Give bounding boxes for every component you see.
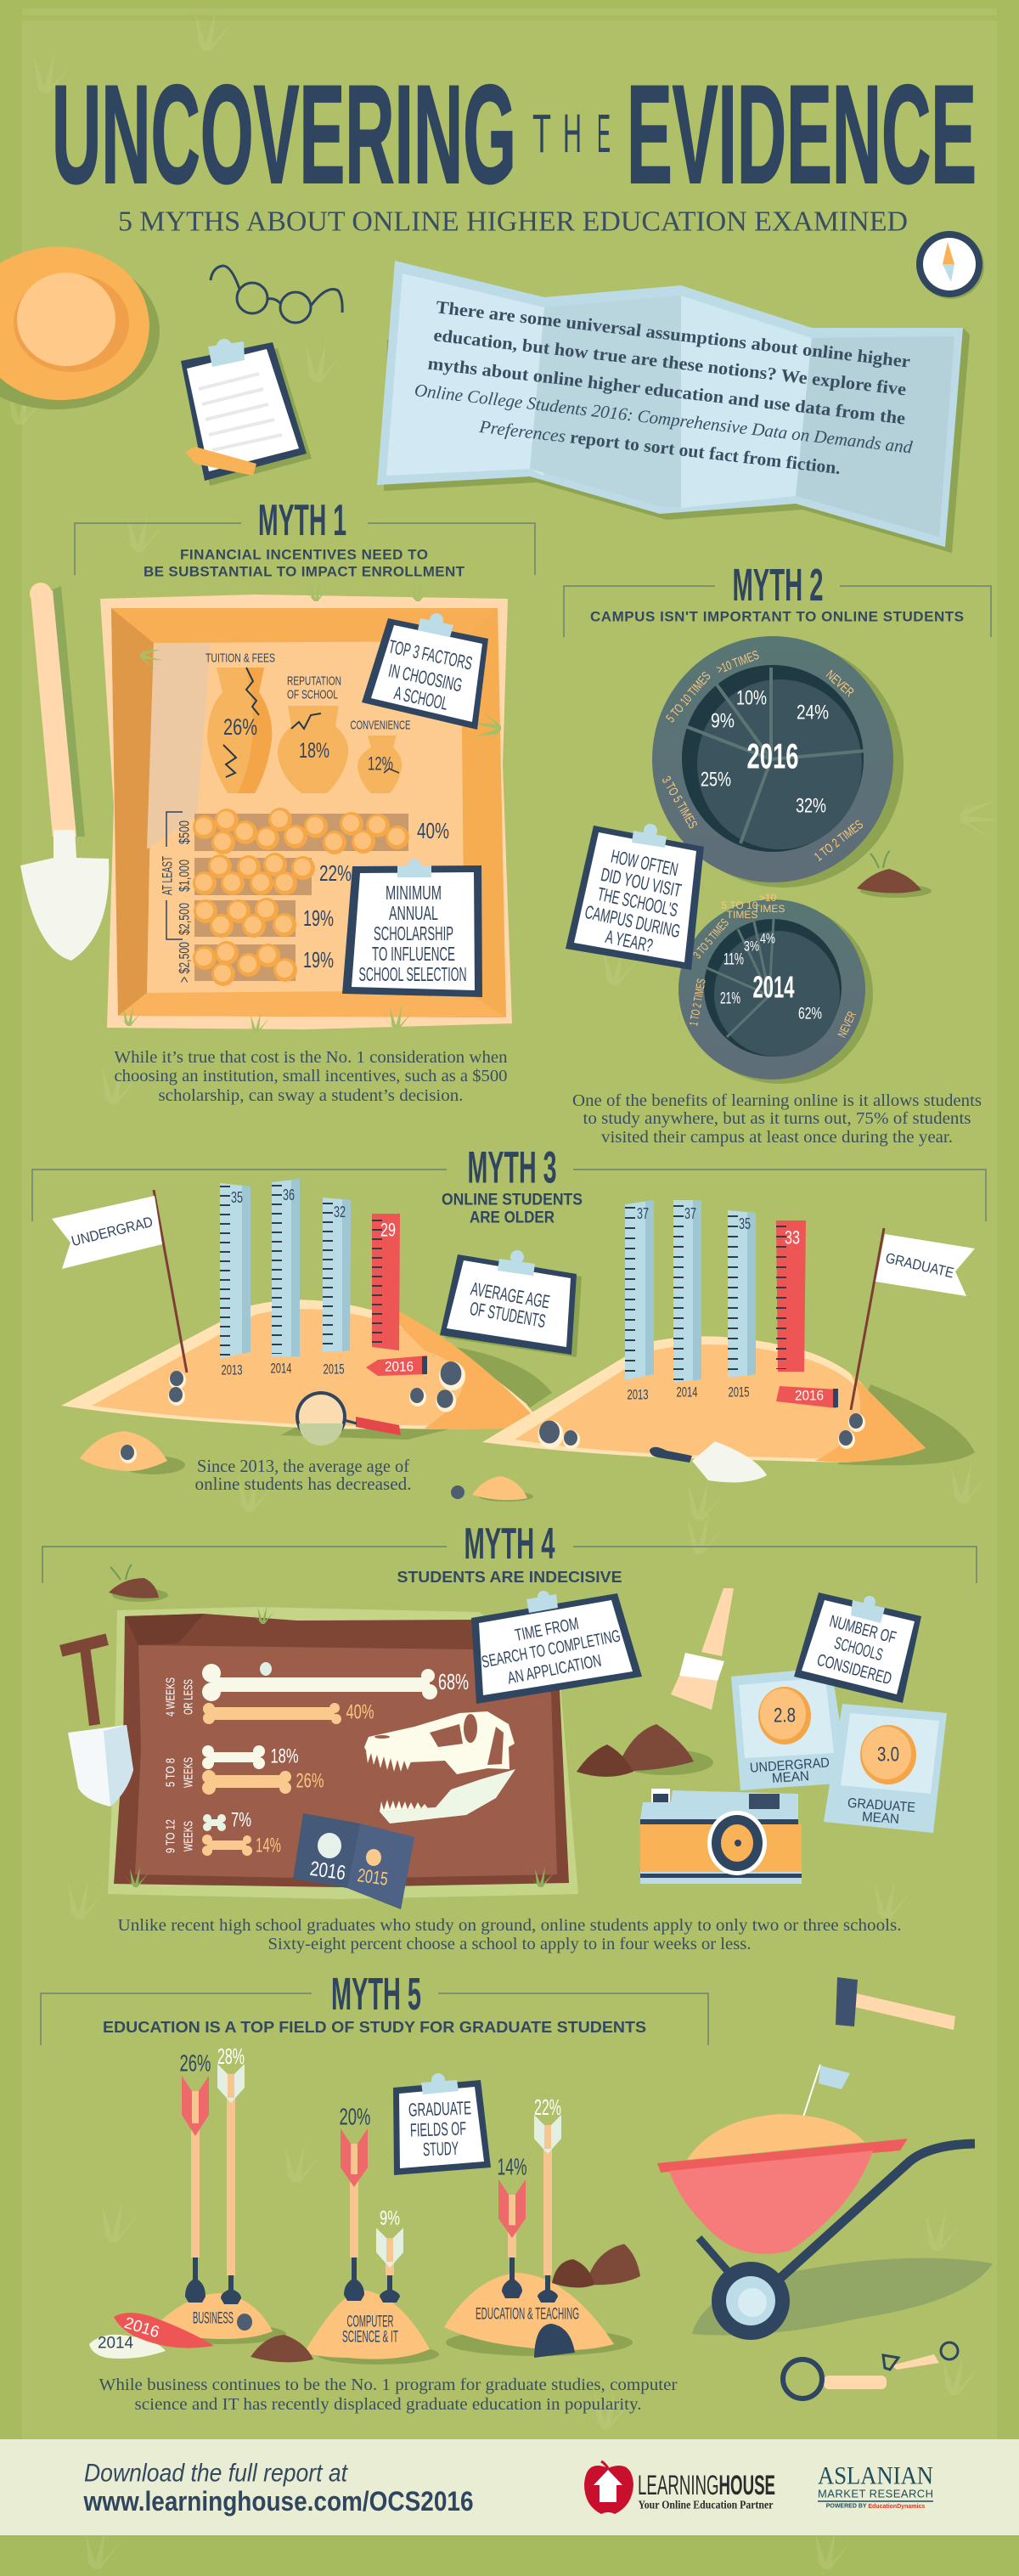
bone: 5 to 8 weeks 2016 — [202, 1745, 299, 1769]
group labels: WEEKS — [182, 1821, 195, 1852]
intro text: myths about online higher education and use data from the — [426, 353, 907, 428]
icon: glasses — [211, 266, 342, 323]
dial 2014 values: 4% — [760, 931, 775, 946]
icon: shovel — [20, 583, 109, 961]
ruler: 2016 value 33 — [776, 1220, 838, 1408]
heading: myth 3: ONLINE STUDENTS — [442, 1191, 583, 1209]
icon: dirt piles — [577, 1724, 713, 1777]
mound: computer science: COMPUTER — [346, 2314, 394, 2331]
flag: undergrad — [52, 1190, 187, 1373]
arrow: computer science 2014: 9% — [380, 2207, 400, 2230]
ruler: 2015 value 35: 35 — [739, 1215, 751, 1232]
legend: feathers: 2014 — [98, 2334, 133, 2353]
ruler: 2014 value 37: 2014 — [676, 1384, 698, 1400]
heading: myth 2 — [564, 560, 991, 637]
chart: coin bars minimum scholarship — [160, 808, 449, 986]
ruler: 2015 value 32: 32 — [334, 1203, 346, 1220]
card: graduate mean: GRADUATE — [847, 1796, 915, 1815]
callout: graduate fields of study: STUDY — [423, 2138, 459, 2160]
bone: 4 weeks 2015: 40% — [346, 1700, 374, 1724]
ruler: 2014 value 37: 37 — [684, 1205, 696, 1222]
footer band — [0, 2439, 1019, 2535]
heading: myth 1: BE SUBSTANTIAL TO IMPACT ENROLLMENT — [144, 564, 465, 579]
ruler: 2014 value 36: 2014 — [270, 1361, 292, 1376]
dial 2014 ring labels: TIMES — [754, 903, 785, 915]
bone: 5 to 8 weeks 2015 — [202, 1770, 324, 1795]
card: undergrad mean: MEAN — [771, 1769, 810, 1786]
vase: reputation of school — [278, 674, 348, 793]
illustration: fossil dig pit — [108, 1605, 578, 1899]
dial 2016 ring labels: NEVER — [823, 668, 857, 700]
title: UNCOVERING — [52, 56, 516, 212]
download call to action: Download the full report at — [84, 2460, 348, 2487]
caption: myth 2: to study anywhere, but as it turns out, 75% of students — [583, 1109, 971, 1128]
title: E — [597, 103, 611, 164]
arrow: computer science 2016 — [340, 2103, 370, 2301]
logo: aslanian market research: POWERED BY EducationDynamics — [826, 2504, 925, 2509]
vase: reputation of school: 18% — [299, 739, 329, 763]
logo: the learning house: LEARNINGHOUSE — [638, 2470, 775, 2500]
callout: how often: DID YOU VISIT — [599, 864, 684, 901]
dial 2014 ring labels: 3 TO 5 TIMES — [690, 916, 731, 961]
arrow: business 2016 — [180, 2050, 211, 2303]
icon: small brush — [883, 2342, 958, 2370]
logo: the learning house: Your Online Education Partner — [639, 2499, 774, 2511]
icon: trowel — [650, 1441, 767, 1482]
icon: clipboard and pencil — [181, 339, 312, 486]
callout: top 3 factors: TOP 3 FACTORS — [386, 635, 475, 674]
callout: time from search: SEARCH TO COMPLETING — [480, 1626, 622, 1672]
vase: tuition and fees: 26% — [223, 714, 257, 740]
download call to action — [83, 2460, 473, 2517]
mound: education and teaching — [444, 2273, 633, 2358]
legend: feathers — [89, 2313, 214, 2359]
intro text: education, but how true are these notions? We explore five — [432, 324, 907, 399]
dial 2016 values: 10% — [736, 686, 767, 710]
bar labels: > $2,500 — [177, 942, 192, 983]
callout: minimum annual scholarship: MINIMUM — [386, 882, 442, 904]
heading: myth 5: MYTH 5 — [331, 1969, 421, 2020]
bar labels: 22% — [319, 860, 352, 886]
dial 2016 ring labels: 1 TO 2 TIMES — [812, 817, 866, 865]
icon: dirt piles — [251, 2244, 640, 2362]
chart: graduate rulers — [625, 1200, 838, 1408]
card: graduate mean: 3.0 — [877, 1743, 899, 1767]
dial 2014 ring labels: 5 TO 10 — [722, 899, 758, 911]
arrow: computer science 2016: 20% — [340, 2103, 370, 2130]
flag: undergrad: UNDERGRAD — [70, 1214, 155, 1249]
icon: magnifying glass small — [783, 2359, 887, 2398]
legend: fold-out map — [293, 1813, 414, 1909]
icon: explorer hat — [0, 246, 160, 409]
bone: 9 to 12 weeks 2015 — [202, 1835, 281, 1857]
bone: 4 weeks 2016: 68% — [438, 1669, 469, 1694]
callout: time from search — [471, 1591, 642, 1704]
bar labels: 19% — [303, 947, 334, 972]
group labels — [163, 1677, 195, 1853]
caption: myth 5: While business continues to be the No. 1 program for graduate studies, computer — [99, 2376, 678, 2394]
icon: stones — [168, 1361, 465, 1412]
chart: undergrad rulers — [220, 1179, 427, 1378]
arrow: education 2016 — [498, 2154, 526, 2298]
title word: the: T — [532, 103, 551, 164]
intro text: Online College Students 2016: Comprehensive Data on Demands and — [414, 380, 914, 458]
title word: the: H — [563, 103, 582, 164]
card: undergrad mean — [731, 1667, 849, 1790]
icon: small dirt pile — [80, 1431, 185, 1474]
chart: arrows graduate fields — [149, 2043, 640, 2365]
logo: aslanian market research: MARKET RESEARCH — [818, 2487, 933, 2500]
legend: fold-out map: 2016 — [308, 1857, 347, 1885]
callout: graduate fields of study: GRADUATE — [408, 2097, 471, 2121]
callout: how often: HOW OFTEN — [609, 845, 680, 881]
callout: minimum annual scholarship: SCHOOL SELECTION — [358, 963, 467, 985]
heading: myth 5: EDUCATION IS A TOP FIELD OF STUDY FOR GRADUATE STUDENTS — [103, 2019, 646, 2036]
card: undergrad mean: UNDERGRAD — [750, 1756, 830, 1776]
icon: stones on graduate mound — [538, 1413, 865, 1449]
bar labels: 19% — [303, 905, 334, 931]
dial 2014 values — [720, 931, 822, 1023]
arrow: business 2016: 26% — [180, 2050, 211, 2076]
bar labels: 40% — [417, 818, 449, 843]
flag on dirt — [798, 2065, 850, 2133]
callout: number of schools: SCHOOLS — [832, 1634, 885, 1665]
caption: myth 2 — [572, 1091, 982, 1147]
ruler: 2013 value 37: 37 — [637, 1205, 649, 1222]
panel: myth 1 — [20, 496, 535, 1105]
caption: myth 4 — [117, 1916, 902, 1953]
callout: time from search: AN APPLICATION — [506, 1652, 603, 1688]
ruler: 2013 value 35: 35 — [231, 1189, 243, 1206]
group labels: 5 TO 8 — [163, 1758, 178, 1787]
callout: graduate fields of study: FIELDS OF — [410, 2117, 466, 2141]
icon: small dirt mound — [109, 1564, 168, 1602]
download call to action: www.learninghouse.com/OCS2016 — [83, 2486, 473, 2517]
flag: graduate — [851, 1228, 975, 1410]
caption: myth 1: While it’s true that cost is the No. 1 consideration when — [114, 1048, 508, 1067]
bone: 5 to 8 weeks 2015: 26% — [296, 1770, 324, 1792]
callout: minimum annual scholarship: ANNUAL — [389, 902, 438, 924]
callout: how often: THE SCHOOL'S — [595, 883, 680, 921]
title word: the — [532, 103, 611, 164]
intro text — [410, 296, 924, 486]
legend: fold-out map: 2015 — [356, 1864, 390, 1890]
ruler: 2015 value 32: 2015 — [323, 1361, 345, 1378]
pebble — [260, 1662, 272, 1676]
callout: top 3 factors: IN CHOOSING — [386, 660, 464, 696]
intro text: Preferences report to sort out fact from fiction. — [477, 416, 842, 478]
ruler: 2014 value 37 — [673, 1200, 701, 1400]
bar labels: $1,000 — [177, 860, 192, 892]
dial 2014 ring labels: TIMES — [727, 909, 757, 921]
mound: computer science: SCIENCE & IT — [342, 2329, 398, 2346]
group labels: 4 WEEKS — [163, 1677, 178, 1716]
dial 2014 ring labels — [686, 892, 859, 1040]
bone: 9 to 12 weeks 2016: 7% — [231, 1809, 251, 1831]
dial 2016 values: 9% — [711, 710, 735, 732]
ruler: 2016 value 33: 2016 — [795, 1388, 824, 1403]
card: graduate mean: MEAN — [861, 1810, 900, 1827]
legend: feathers: 2016 — [122, 2314, 161, 2342]
callout: top 3 factors: A SCHOOL — [392, 682, 450, 714]
arrow: education 2014: 22% — [534, 2094, 561, 2120]
heading: myth 1: FINANCIAL INCENTIVES NEED TO — [180, 547, 428, 562]
caption: myth 1 — [114, 1048, 508, 1105]
panel: myth 3 — [32, 1143, 986, 1502]
bar labels: $2,500 — [177, 903, 192, 935]
card: undergrad mean: 2.8 — [774, 1704, 796, 1728]
dial 2014 values: 3% — [744, 938, 759, 955]
bar labels: AT LEAST — [160, 856, 175, 895]
chart: stone dial 2014 — [678, 892, 873, 1084]
vase: reputation of school: OF SCHOOL — [287, 688, 338, 702]
ruler: 2016 value 33: 33 — [785, 1226, 800, 1249]
callout: minimum annual scholarship: SCHOLARSHIP — [374, 922, 453, 944]
bone: 4 weeks 2015 — [203, 1700, 374, 1724]
callout: graduate fields of study — [393, 2073, 491, 2175]
heading: myth 5 — [41, 1969, 708, 2045]
arrow: computer science 2014 — [376, 2207, 403, 2303]
caption: myth 2: visited their campus at least once during the year. — [601, 1128, 953, 1147]
caption: myth 3: Since 2013, the average age of — [197, 1456, 409, 1476]
arrow: education 2016: 14% — [498, 2154, 526, 2179]
ruler: 2013 value 37 — [625, 1200, 654, 1403]
dial 2014 values: 2014 — [752, 970, 795, 1004]
dial 2016 values — [701, 686, 829, 817]
flag: graduate: GRADUATE — [884, 1250, 955, 1281]
dial 2014 ring labels: >10 — [759, 892, 777, 904]
dial 2014 values: 11% — [723, 951, 744, 968]
dial 2016 ring labels: 3 TO 5 TIMES — [659, 774, 700, 831]
group labels: 9 TO 12 — [163, 1819, 178, 1853]
arrow: business 2014: 28% — [217, 2043, 245, 2069]
illustration: dinosaur skull — [364, 1711, 515, 1823]
bone: 4 weeks 2016 — [202, 1664, 469, 1701]
ruler: 2015 value 35 — [728, 1210, 756, 1400]
dial 2014 values: 62% — [798, 1006, 822, 1023]
subtitle: 5 MYTHS ABOUT ONLINE HIGHER EDUCATION EXAMINED — [118, 206, 908, 238]
card: graduate mean — [824, 1704, 947, 1833]
ruler: 2015 value 35: 2015 — [729, 1384, 749, 1400]
ruler: 2014 value 36: 36 — [283, 1187, 295, 1203]
dial 2016 values: 32% — [796, 795, 826, 817]
vase: convenience: 12% — [368, 753, 393, 775]
illustration: graduate dig mound — [482, 1336, 975, 1465]
dial 2016 values: 2016 — [747, 736, 798, 776]
caption: myth 5 — [99, 2376, 678, 2414]
heading: myth 1: MYTH 1 — [258, 496, 346, 545]
callout: average age — [440, 1250, 582, 1357]
callout: how often — [566, 824, 704, 970]
vase: convenience — [350, 719, 411, 793]
icon: small dirt pile with stone — [451, 1476, 533, 1502]
vase: tuition and fees: TUITION & FEES — [205, 651, 275, 666]
arrow: business 2014 — [217, 2043, 245, 2304]
callout: number of schools: CONSIDERED — [815, 1651, 893, 1688]
heading: myth 1 — [75, 496, 535, 579]
dial 2014 ring labels: 1 TO 2 TIMES — [686, 978, 708, 1027]
callout: number of schools — [794, 1592, 921, 1703]
ruler: 2013 value 37: 2013 — [627, 1386, 649, 1403]
icon: spade — [59, 1633, 133, 1807]
intro text: There are some universal assumptions about online higher — [435, 296, 911, 372]
ruler: 2016 value 29: 29 — [380, 1220, 396, 1240]
ruler: 2016 value 29: 2016 — [385, 1359, 414, 1374]
callout: how often: CAMPUS DURING — [583, 901, 682, 942]
mound: computer science — [304, 2290, 439, 2365]
icon: compass — [916, 231, 984, 299]
icon: hammer — [836, 1977, 955, 2030]
heading: myth 3: ARE OLDER — [470, 1209, 555, 1226]
panel: myth 2 — [564, 560, 991, 1147]
ruler: 2013 value 35 — [220, 1183, 251, 1378]
callout: number of schools: NUMBER OF — [828, 1612, 898, 1648]
panel: intro map — [377, 261, 970, 553]
caption: myth 4: Sixty-eight percent choose a school to apply to in four weeks or less. — [268, 1935, 751, 1953]
vase: tuition and fees — [205, 651, 275, 793]
heading: myth 4: STUDENTS ARE INDECISIVE — [397, 1569, 622, 1586]
vase: convenience: CONVENIENCE — [350, 719, 411, 732]
bone: 9 to 12 weeks 2015: 14% — [256, 1835, 281, 1857]
dial 2014 values: 21% — [720, 990, 740, 1007]
icon: dirt mound — [857, 851, 932, 898]
dial 2014 ring labels: NEVER — [835, 1009, 859, 1040]
group labels: WEEKS — [182, 1757, 195, 1788]
panel: myth 5 — [41, 1969, 993, 2414]
bar labels: $500 — [177, 820, 192, 844]
logo: aslanian market research — [818, 2461, 933, 2509]
heading: myth 4 — [42, 1519, 977, 1586]
icon: camera — [640, 1789, 802, 1884]
ruler: 2016 value 29 — [366, 1214, 427, 1376]
caption: myth 4: Unlike recent high school graduates who study on ground, online students apply to only two or three schools. — [117, 1916, 902, 1935]
dial 2016 ring labels — [659, 648, 866, 865]
caption: myth 3: online students has decreased. — [195, 1474, 411, 1494]
chart: vases top 3 factors — [205, 651, 411, 793]
ruler: 2014 value 36 — [270, 1179, 300, 1376]
caption: myth 2: One of the benefits of learning online is it allows students — [572, 1091, 982, 1110]
callout: average age: AVERAGE AGE — [470, 1278, 551, 1312]
mound: education and teaching: EDUCATION & TEACHING — [476, 2305, 579, 2324]
caption: myth 1: choosing an institution, small incentives, such as a $500 — [114, 1067, 508, 1085]
bone: 9 to 12 weeks 2016 — [203, 1809, 251, 1831]
chart: bone bars — [163, 1662, 469, 1857]
callout: minimum annual scholarship — [342, 859, 482, 997]
mound: business: BUSINESS — [193, 2310, 234, 2327]
illustration: excavation pit — [100, 579, 512, 1033]
bone: 5 to 8 weeks 2016: 18% — [270, 1745, 299, 1768]
heading: myth 2: MYTH 2 — [732, 560, 824, 611]
caption: myth 5: science and IT has recently displaced graduate education in popularity. — [134, 2395, 642, 2414]
heading: myth 4: MYTH 4 — [464, 1519, 555, 1569]
callout: how often: A YEAR? — [604, 926, 655, 956]
ruler: 2013 value 35: 2013 — [221, 1362, 243, 1378]
callout: average age: OF STUDENTS — [469, 1298, 547, 1332]
logo: aslanian market research: ASLANIAN — [818, 2461, 933, 2490]
callout: top 3 factors — [362, 613, 488, 730]
dial 2016 values: 25% — [701, 768, 731, 792]
mound: business — [149, 2293, 286, 2344]
illustration: undergrad dig mound — [61, 1299, 552, 1440]
caption: myth 3 — [195, 1456, 411, 1494]
panel: myth 4 — [42, 1519, 977, 1953]
group labels: OR LESS — [182, 1679, 195, 1715]
caption: myth 1: scholarship, can sway a student’s decision. — [158, 1086, 464, 1105]
illustration: wheelbarrow — [657, 2065, 993, 2340]
callout: time from search: TIME FROM — [514, 1615, 580, 1645]
icon: magnifying glass — [296, 1391, 401, 1446]
callout: minimum annual scholarship: TO INFLUENCE — [372, 943, 455, 965]
dial 2016 values: 24% — [797, 702, 829, 724]
icon: brush — [671, 1588, 734, 1710]
dial 2016 ring labels: >10 TIMES — [715, 648, 761, 677]
heading: myth 2: CAMPUS ISN'T IMPORTANT TO ONLINE STUDENTS — [590, 608, 964, 625]
logo: the learning house — [584, 2461, 775, 2514]
arrow: education 2014 — [534, 2094, 561, 2303]
heading: myth 3 — [32, 1143, 986, 1226]
ruler: 2015 value 32 — [323, 1198, 351, 1378]
vase: reputation of school: REPUTATION — [287, 674, 341, 688]
bar labels — [160, 818, 449, 983]
heading: myth 3: MYTH 3 — [467, 1143, 557, 1192]
chart: stone dial 2016 — [652, 636, 904, 888]
dial 2016 ring labels: 5 TO 10 TIMES — [663, 669, 714, 725]
